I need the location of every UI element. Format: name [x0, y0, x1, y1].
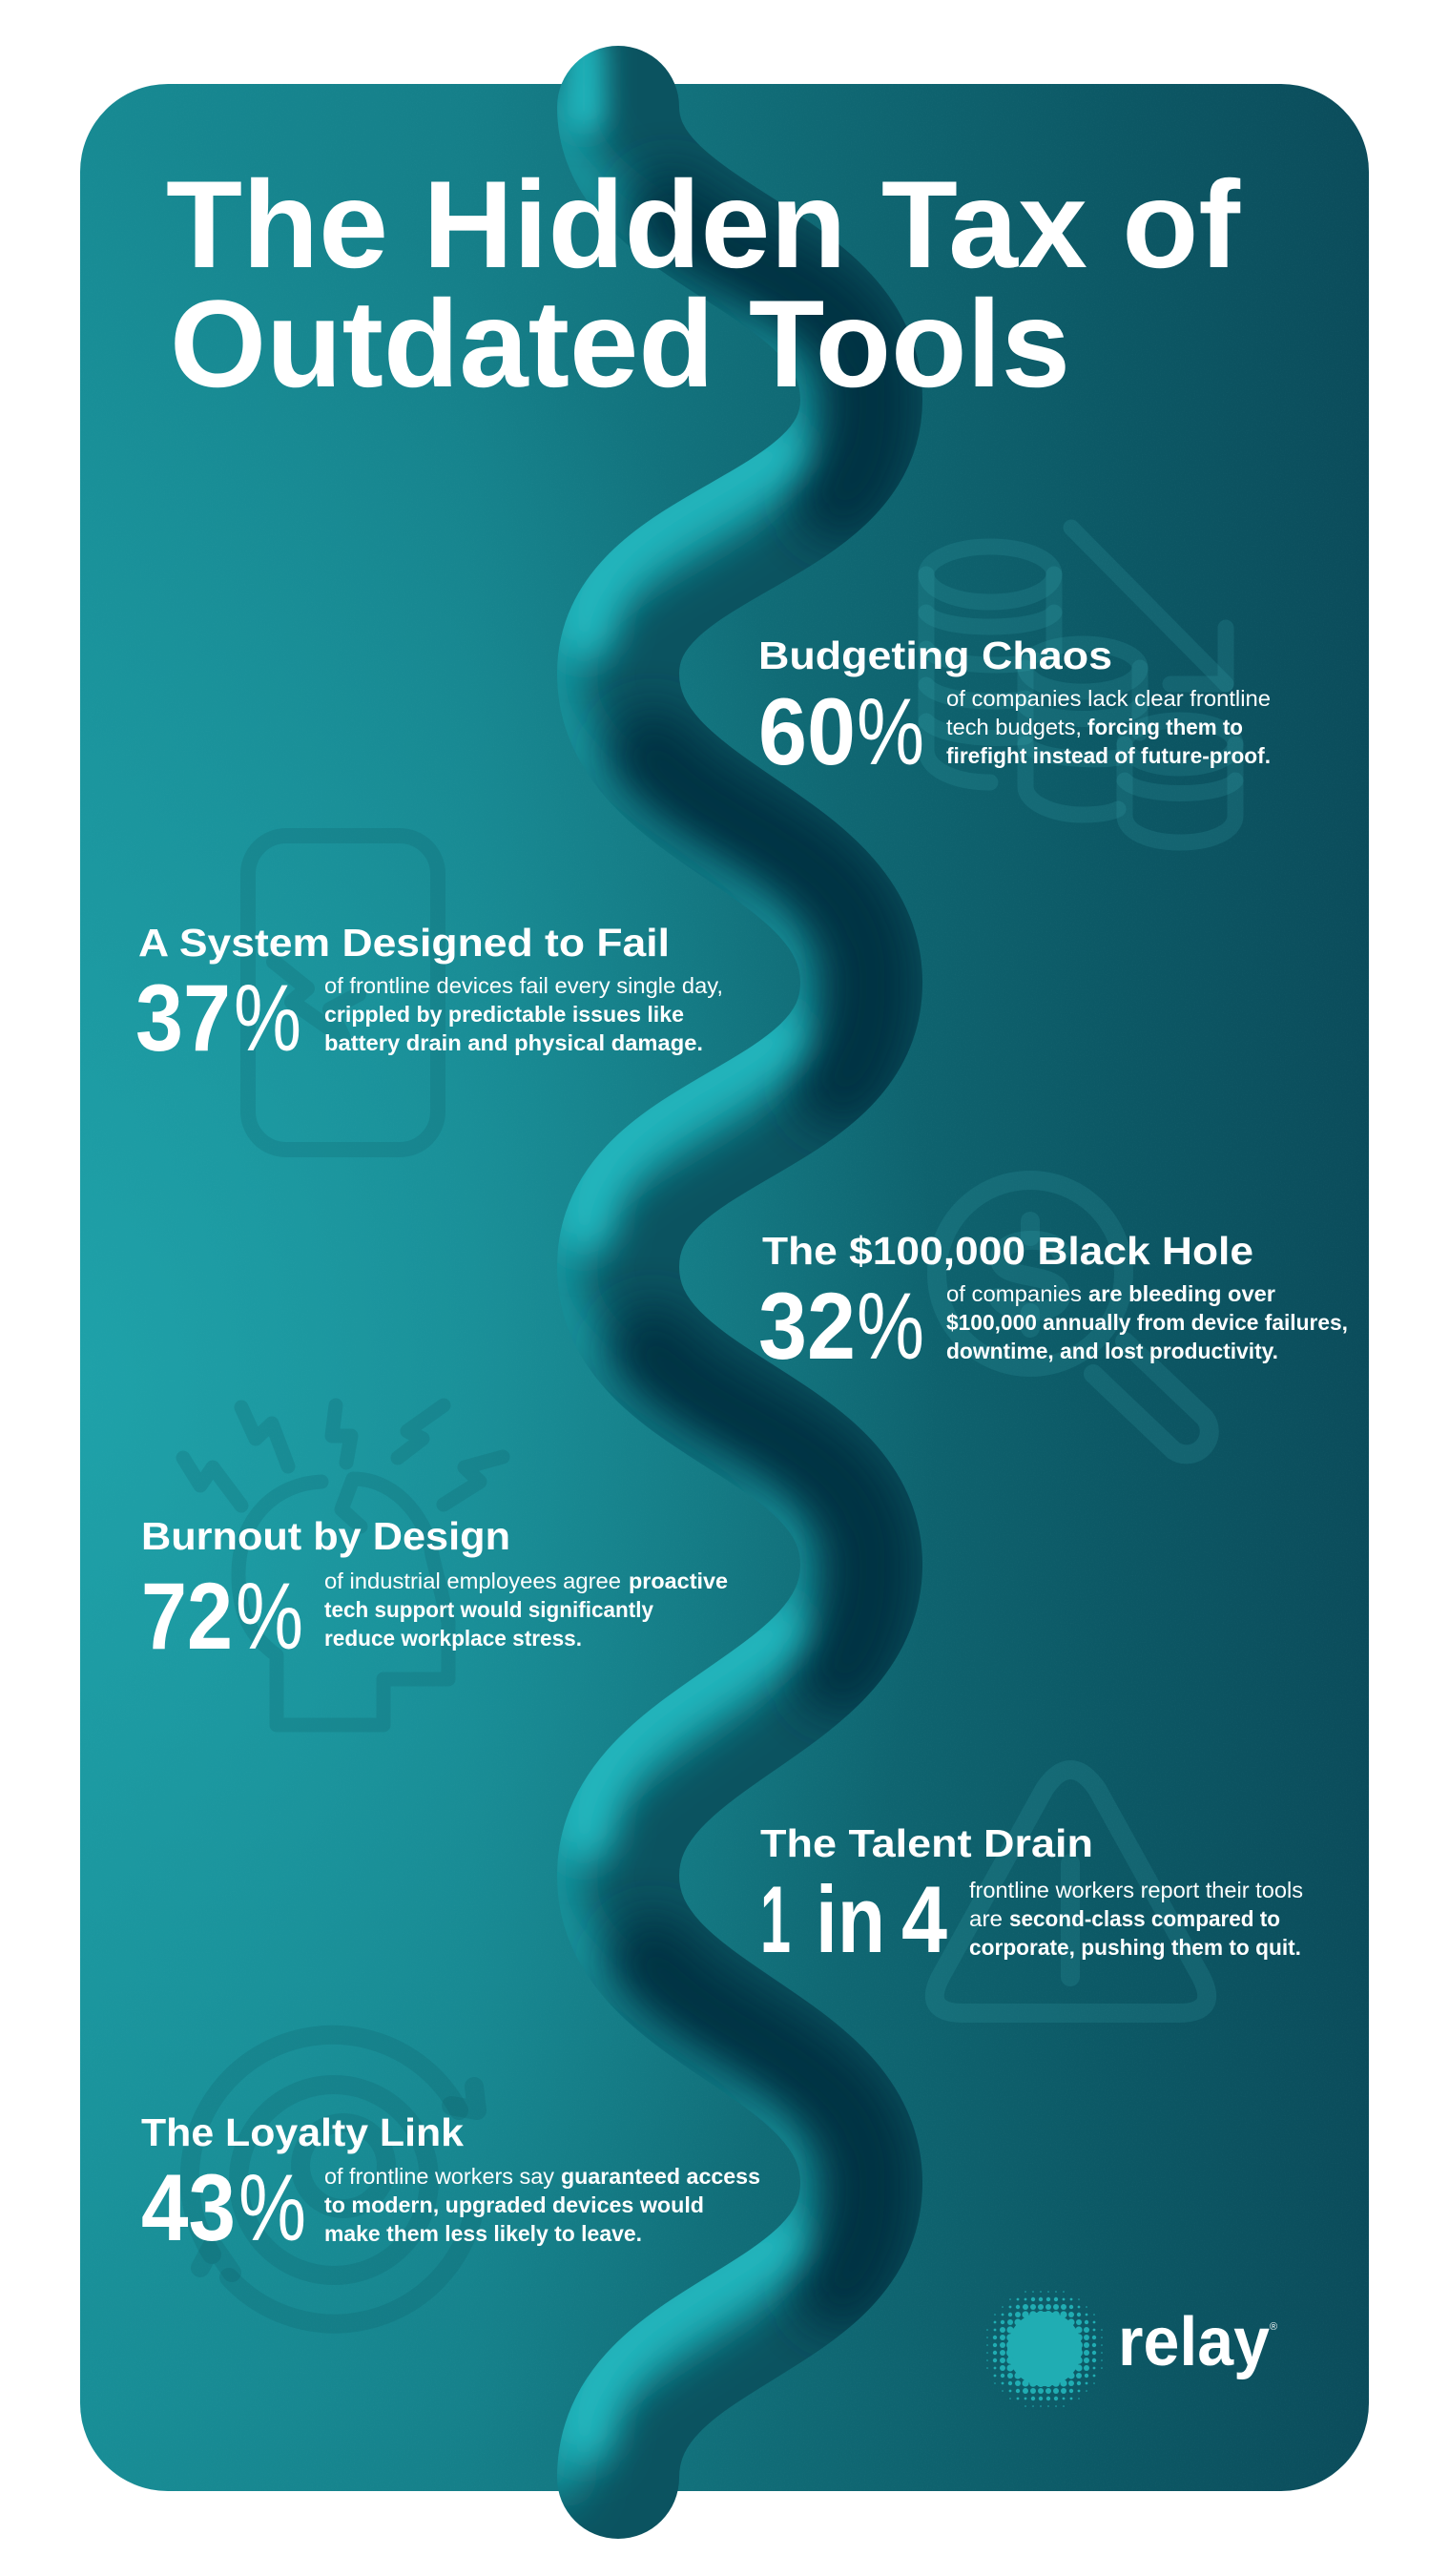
stat: Budgeting Chaos: forcing them to	[1087, 715, 1243, 739]
stat: The $100,000 Black Hole: %	[857, 1273, 924, 1379]
icon: cracked phone	[248, 836, 438, 1150]
icon: halftone circle	[986, 2291, 1103, 2407]
icon: warning triangle	[935, 1770, 1207, 2013]
icon: magnifier with dollar sign	[937, 1180, 1210, 1454]
title: The Hidden Tax of	[166, 155, 1241, 294]
stat: A System Designed to Fail	[135, 921, 723, 1070]
stat: A System Designed to Fail: crippled by predictable issues like	[324, 1002, 684, 1027]
stat: Budgeting Chaos	[758, 634, 1271, 784]
stat: Burnout by Design: 72	[141, 1563, 233, 1669]
stat: The Talent Drain: 4	[901, 1866, 947, 1972]
stat: Burnout by Design: proactive	[629, 1568, 728, 1593]
stat: The Talent Drain: corporate, pushing them to quit.	[969, 1935, 1301, 1960]
stat: The $100,000 Black Hole: $100,000 annually from device failures,	[946, 1310, 1348, 1335]
stat: Budgeting Chaos: of companies lack clear frontline	[946, 686, 1271, 711]
wordmark: relay	[1118, 2304, 1270, 2380]
stat: A System Designed to Fail: battery drain and physical damage.	[324, 1030, 703, 1055]
stat: The Loyalty Link: %	[238, 2154, 306, 2260]
stat: The Talent Drain: frontline workers report their tools	[969, 1878, 1303, 1902]
stat: The $100,000 Black Hole	[758, 1229, 1348, 1379]
stat: The Talent Drain	[760, 1821, 1303, 1972]
stat: Burnout by Design	[141, 1514, 728, 1669]
icon: circular arrows target	[190, 2035, 477, 2324]
stat: The Talent Drain: 1	[760, 1866, 791, 1972]
stat: The Loyalty Link: guaranteed access	[561, 2164, 760, 2189]
stat: The Talent Drain: are	[969, 1906, 1003, 1931]
wavy 3D tube	[551, 48, 873, 2478]
logo: relay halftone mark and wordmark	[986, 2291, 1277, 2407]
stat: The Loyalty Link: make them less likely to leave.	[324, 2221, 642, 2246]
icon: head with lightning bolts	[183, 1405, 503, 1725]
stat: Budgeting Chaos: %	[857, 678, 924, 784]
stat: The $100,000 Black Hole: of companies	[946, 1281, 1082, 1306]
stat: The Talent Drain: second-class compared to	[1009, 1906, 1280, 1931]
stat: The $100,000 Black Hole: downtime, and lost productivity.	[946, 1339, 1278, 1363]
stat: Burnout by Design: of industrial employees agree	[324, 1568, 621, 1593]
icon: coin stacks with falling arrow	[926, 528, 1235, 842]
title	[166, 155, 1241, 413]
stat: Burnout by Design: Burnout by Design	[141, 1514, 510, 1558]
stat: A System Designed to Fail: A System Designed to Fail	[138, 921, 670, 965]
stat: The Loyalty Link: 43	[141, 2154, 236, 2260]
stat: The Talent Drain: in	[816, 1866, 885, 1972]
stat: The $100,000 Black Hole: The $100,000 Black Hole	[762, 1229, 1253, 1273]
stat: The $100,000 Black Hole: are bleeding over	[1088, 1281, 1275, 1306]
stat: A System Designed to Fail: %	[234, 965, 301, 1070]
stat: Budgeting Chaos: tech budgets,	[946, 715, 1082, 739]
stat: The Loyalty Link: The Loyalty Link	[141, 2110, 464, 2154]
stat: The Loyalty Link: of frontline workers say	[324, 2164, 555, 2189]
stat: A System Designed to Fail: of frontline devices fail every single day,	[324, 973, 723, 998]
stat: The Talent Drain: The Talent Drain	[760, 1821, 1093, 1865]
wordmark: ®	[1270, 2321, 1277, 2333]
stat: Burnout by Design: %	[236, 1563, 303, 1669]
stat: Budgeting Chaos: firefight instead of future-proof.	[946, 743, 1271, 768]
stat: Budgeting Chaos: Budgeting Chaos	[758, 634, 1112, 677]
stat: The Loyalty Link	[141, 2110, 760, 2260]
stat: The Loyalty Link: to modern, upgraded devices would	[324, 2192, 704, 2217]
stat: A System Designed to Fail: 37	[135, 965, 231, 1070]
stat: Budgeting Chaos: 60	[758, 678, 856, 784]
stat: Burnout by Design: reduce workplace stress.	[324, 1626, 582, 1651]
title: Outdated Tools	[170, 274, 1070, 413]
stat: The $100,000 Black Hole: 32	[758, 1273, 856, 1379]
stat: Burnout by Design: tech support would significantly	[324, 1597, 653, 1622]
